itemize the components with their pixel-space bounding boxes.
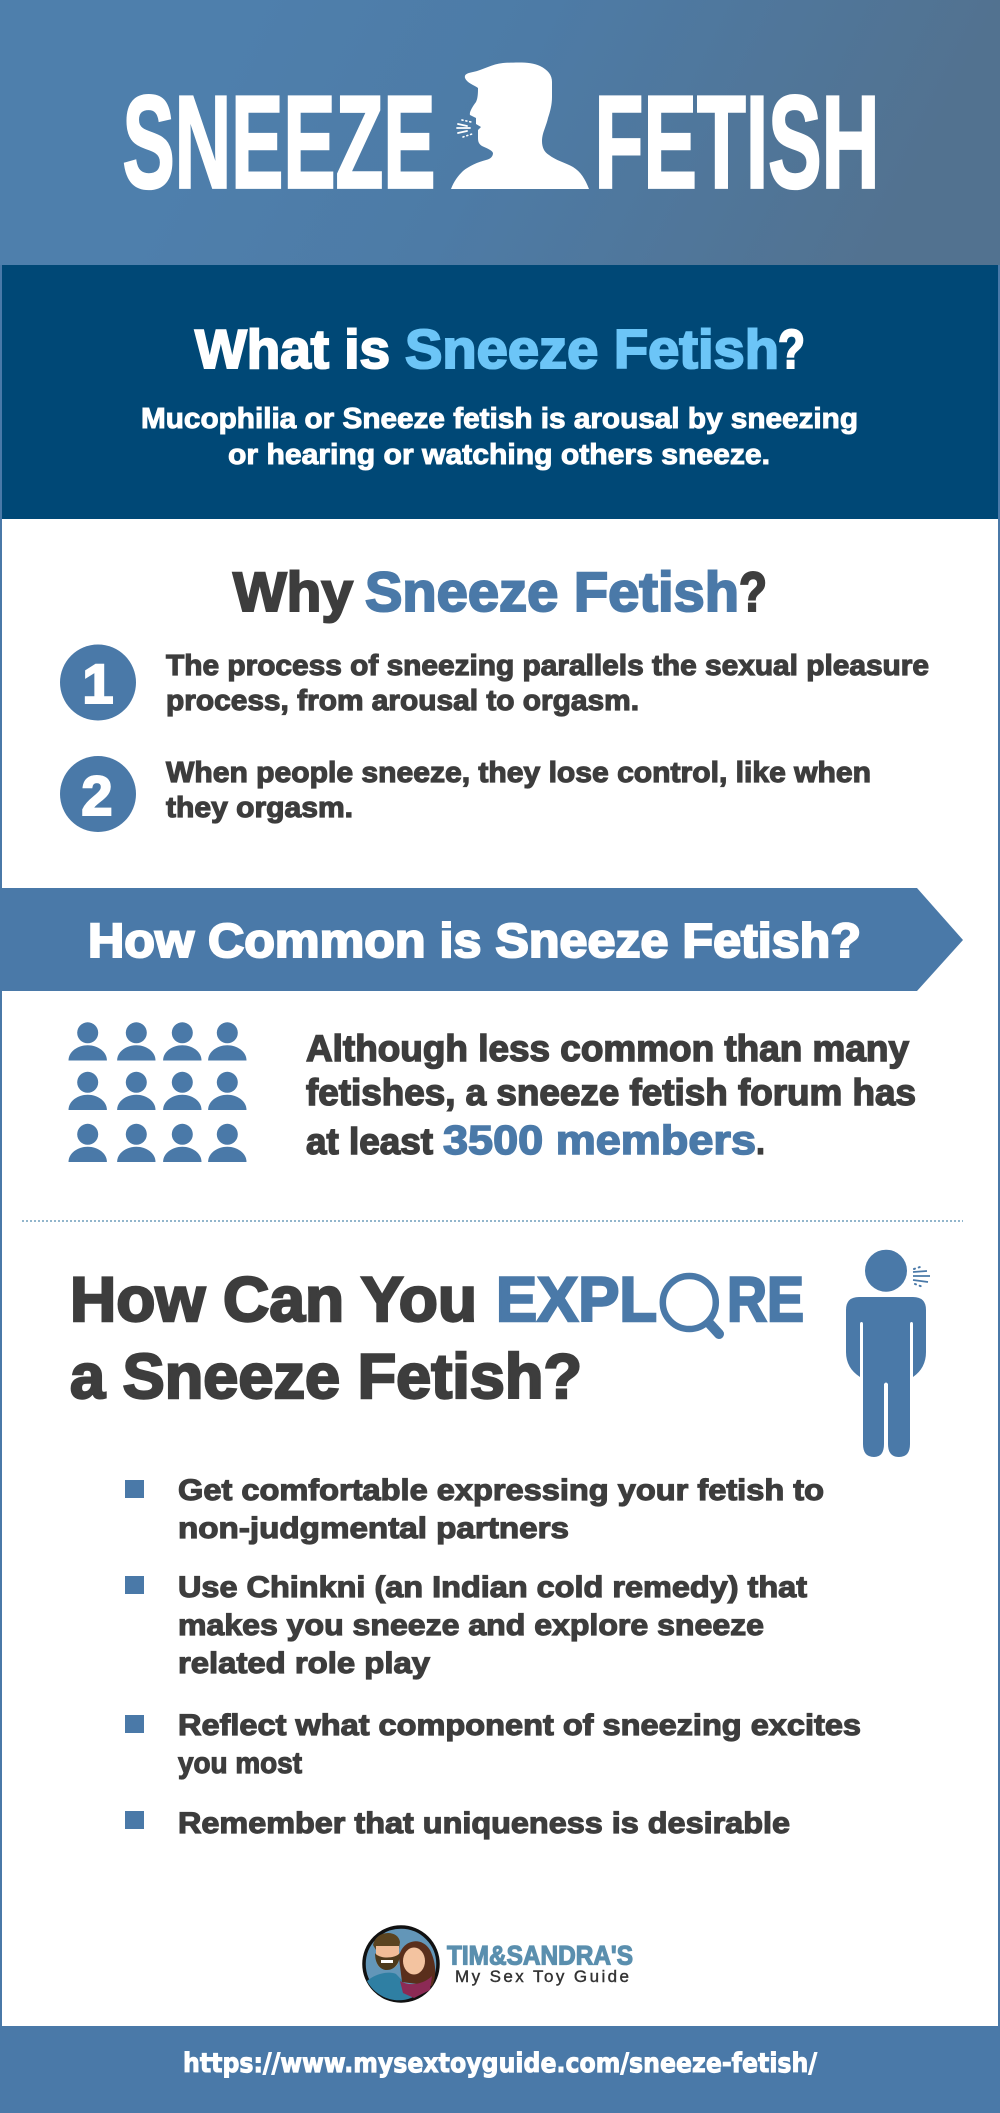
heading: what is: What is	[195, 318, 390, 380]
number badge 2: 2	[81, 764, 113, 827]
number badge 2	[60, 756, 136, 832]
heading: why: ?	[739, 560, 767, 623]
bullet list: ways to explore	[125, 1474, 861, 1840]
bullet 1: non-judgmental partners	[178, 1512, 569, 1545]
text: forum members: at least	[306, 1121, 433, 1162]
heading: why	[233, 560, 767, 623]
heading: how can you explore: a Sneeze Fetish?	[70, 1342, 582, 1412]
reason 2 text: When people sneeze, they lose control, like when	[166, 757, 871, 789]
bullet 3: you most	[178, 1747, 302, 1780]
panel: what is sneeze fetish	[2, 265, 998, 519]
footer bar	[0, 2026, 1000, 2113]
heading: how can you explore: RE	[727, 1265, 804, 1335]
text: forum members: .	[756, 1121, 765, 1162]
reason 1 text	[166, 650, 929, 717]
bullet 1: Get comfortable expressing your fetish to	[178, 1474, 824, 1507]
heading: how can you explore: EXPL	[496, 1265, 657, 1335]
definition text: or hearing or watching others sneeze.	[228, 439, 770, 471]
number badge 1: 1	[82, 652, 114, 715]
heading: what is	[195, 318, 805, 380]
panel: why sneeze fetish	[60, 560, 929, 832]
reason 2 text: they orgasm.	[166, 792, 353, 824]
heading: how can you explore	[70, 1265, 804, 1412]
heading: what is: Sneeze Fetish	[405, 318, 779, 380]
bullet 3	[125, 1709, 861, 1780]
icon: sneezing head silhouette	[451, 62, 589, 189]
header banner	[0, 0, 1000, 265]
reason 1 text: process, from arousal to orgasm.	[166, 685, 639, 717]
text: TIM&SANDRA'S	[447, 1940, 633, 1971]
bullet 3: Reflect what component of sneezing excites	[178, 1709, 861, 1742]
reason 1 text: The process of sneezing parallels the sexual pleasure	[166, 650, 929, 682]
icon: standing person sneezing	[846, 1250, 930, 1457]
heading: why: Sneeze Fetish	[365, 560, 739, 623]
bullet 2: makes you sneeze and explore sneeze	[178, 1609, 764, 1642]
heading: how can you explore: How Can You	[70, 1265, 477, 1335]
heading: how common: How Common is Sneeze Fetish?	[88, 915, 861, 968]
text: forum members: Although less common than many	[306, 1028, 909, 1069]
bullet 2	[125, 1571, 807, 1680]
text: forum members: fetishes, a sneeze fetish forum has	[306, 1072, 916, 1113]
bullet 1	[125, 1474, 824, 1545]
definition text: Mucophilia or Sneeze fetish is arousal by sneezing	[141, 403, 858, 435]
icon: magnifying glass letter O	[663, 1276, 719, 1334]
logo: Tim and Sandra's	[364, 1927, 633, 2001]
bullet 2: related role play	[178, 1647, 430, 1680]
bullet 4: Remember that uniqueness is desirable	[178, 1807, 790, 1840]
definition text	[141, 403, 858, 471]
arrow banner: how common	[0, 888, 963, 991]
text: forum members: 3500 members	[443, 1117, 756, 1163]
heading: why: Why	[233, 560, 353, 623]
bullet 2: Use Chinkni (an Indian cold remedy) that	[178, 1571, 807, 1604]
text: forum members	[306, 1028, 916, 1163]
number badge 1	[60, 644, 136, 720]
logo avatar: couple illustration	[364, 1927, 438, 2001]
footer url: https://www.mysextoyguide.com/sneeze-fetish/	[183, 2048, 817, 2079]
reason 2 text	[166, 757, 871, 824]
icon grid: people	[68, 1022, 246, 1162]
heading: what is: ?	[778, 318, 805, 380]
logo: Tim and Sandra's: My Sex Toy Guide	[455, 1967, 629, 1986]
